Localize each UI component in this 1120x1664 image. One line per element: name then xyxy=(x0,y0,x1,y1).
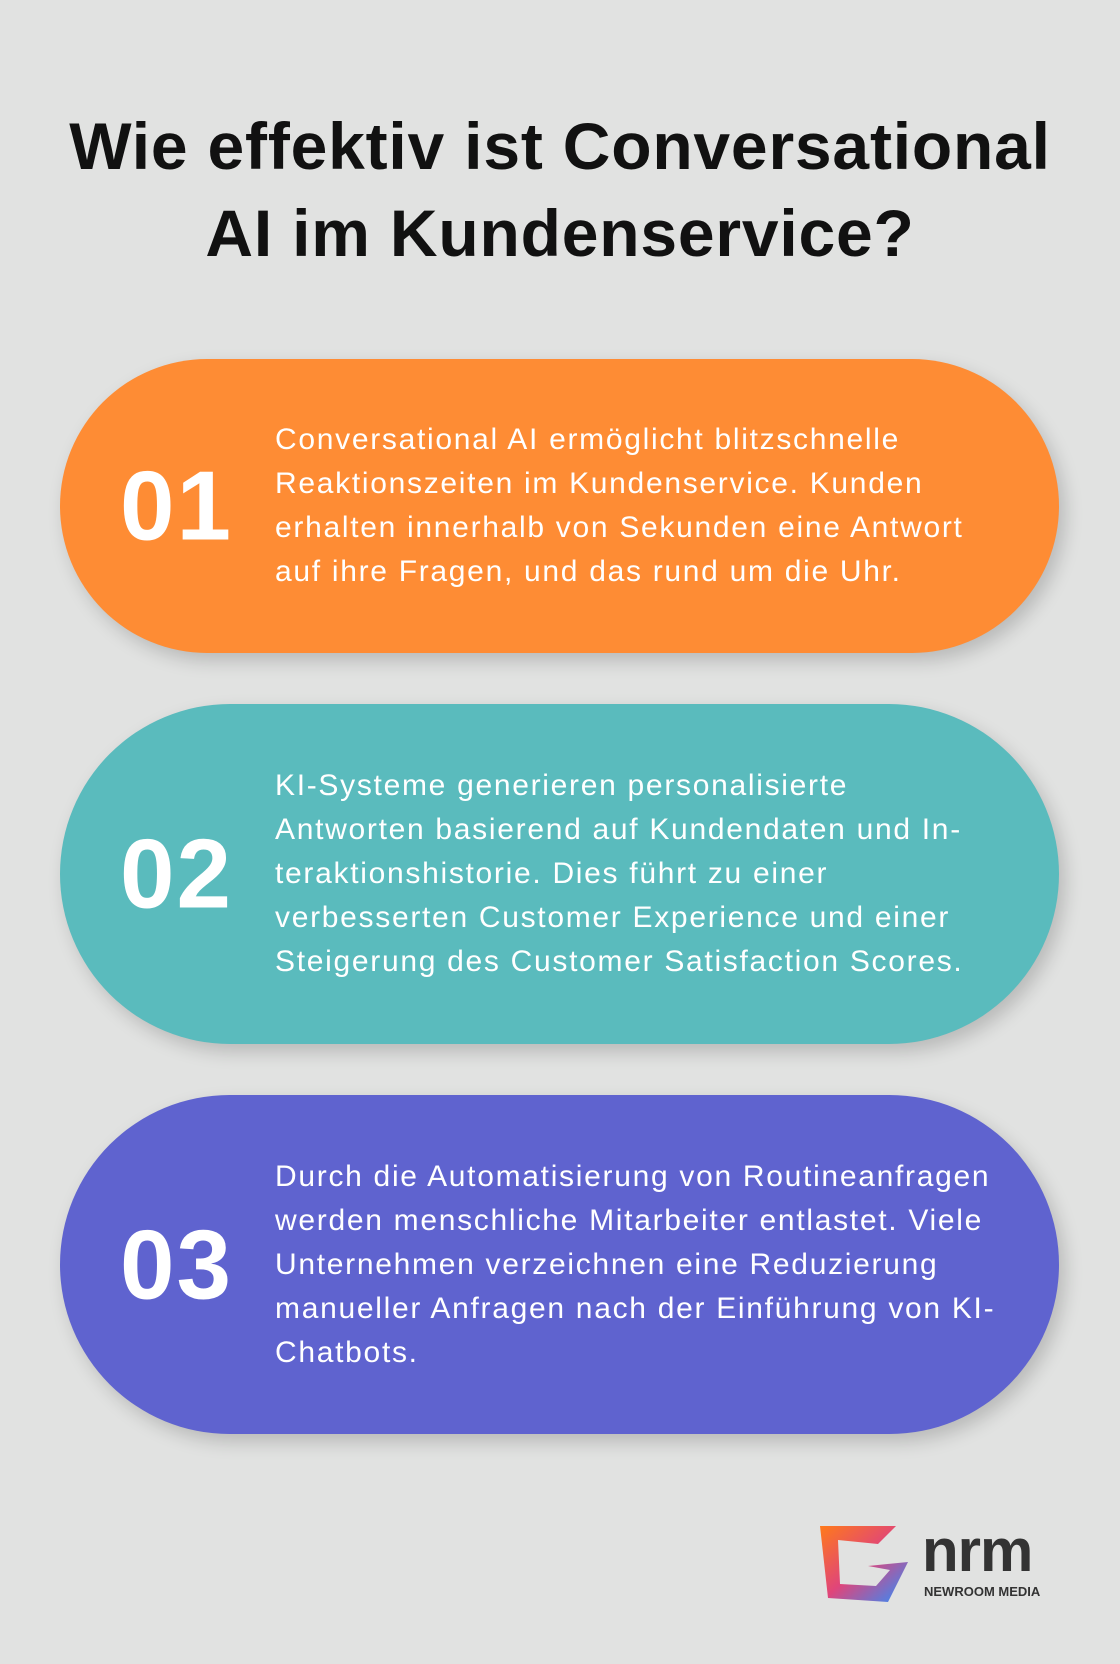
text 02: teraktionshistorie. Dies führt zu einer xyxy=(275,857,828,890)
panel: 03 xyxy=(60,1095,1059,1434)
text 01: Conversational AI ermöglicht blitzschnelle xyxy=(275,423,900,456)
text 03: Chatbots. xyxy=(275,1336,419,1368)
text 02: verbesserten Customer Experience und einer xyxy=(275,901,950,934)
text 02: Antworten basierend auf Kundendaten und In- xyxy=(275,813,962,846)
panel: 02 xyxy=(60,704,1059,1044)
logo xyxy=(820,1517,1040,1602)
number 03: 03 xyxy=(120,1209,233,1319)
icon: logo mark xyxy=(820,1526,908,1602)
text 03: werden menschliche Mitarbeiter entlastet. Viele xyxy=(275,1204,983,1236)
number 01: 01 xyxy=(120,450,233,560)
text 03: Durch die Automatisierung von Routineanfragen xyxy=(275,1160,990,1192)
text 03: manueller Anfragen nach der Einführung von KI- xyxy=(275,1292,995,1324)
text 02: Steigerung des Customer Satisfaction Scores. xyxy=(275,945,963,978)
text 01: Reaktionszeiten im Kundenservice. Kunden xyxy=(275,467,923,500)
title xyxy=(69,109,1051,270)
text 02: KI-Systeme generieren personalisierte xyxy=(275,769,848,802)
number 02: 02 xyxy=(120,818,233,928)
text 01: erhalten innerhalb von Sekunden eine Antwort xyxy=(275,511,964,544)
text 01 xyxy=(275,423,964,588)
title: AI im Kundenservice? xyxy=(205,196,915,270)
text 01: auf ihre Fragen, und das rund um die Uhr. xyxy=(275,555,902,588)
logo text: nrm xyxy=(922,1517,1032,1584)
text 03: Unternehmen verzeichnen eine Reduzierung xyxy=(275,1248,938,1280)
text 02 xyxy=(275,769,963,978)
panel: 01 xyxy=(60,359,1059,653)
logo: NEWROOM MEDIA xyxy=(924,1584,1040,1599)
text 03 xyxy=(275,1160,995,1368)
title: Wie effektiv ist Conversational xyxy=(69,109,1051,183)
